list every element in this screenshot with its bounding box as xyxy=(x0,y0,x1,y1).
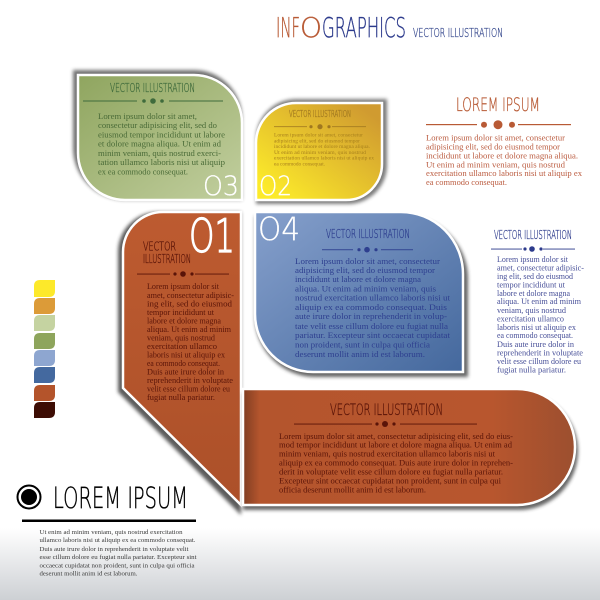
text: brown body: ing elit, sed do eiusmod xyxy=(147,300,232,308)
text: brown body: velit esse cillum dolore eu xyxy=(147,384,230,394)
text: bottom brown body: aliquip ex ea commodo consequat. Duis aute irure dolor in reprehen- xyxy=(279,458,513,467)
text: yellow body: Ut enim ad minim veniam, quis nostrud xyxy=(274,150,366,156)
text: bottom brown body: Excepteur sint occaecat cupidatat non proident, sunt in culpa qui xyxy=(279,476,502,485)
text: blue body: incididunt ut labore et dolore magna xyxy=(295,275,421,284)
heading: brown xyxy=(143,240,191,266)
text: blue body: nostrud exercitation ullamco laboris nisi ut xyxy=(295,294,451,302)
text: blue body: aliquip ex ea commodo consequat. Duis xyxy=(295,303,447,312)
text block xyxy=(40,529,197,577)
text block: tempor incididunt ut xyxy=(497,280,566,290)
number 04: O4 xyxy=(258,210,300,248)
text block: aliqua. Ut enim ad minim xyxy=(497,297,582,306)
panel: 01 brown xyxy=(118,209,241,515)
text block: exercitation ullamco laboris nisi ut aliquip ex xyxy=(426,169,582,178)
text: green body: et dolore magna aliqua. Ut enim ad xyxy=(98,140,221,148)
text: green body: ex ea commodo consequat. xyxy=(98,167,188,176)
text: green body: eiusmod tempor incididunt ut labore xyxy=(98,130,225,139)
text: yellow body: incididunt ut labore et dolore magna aliqua. xyxy=(274,144,371,150)
text block: ea commodo consequat. xyxy=(497,331,573,340)
number 03: O3 xyxy=(203,171,239,202)
colour palette xyxy=(34,280,55,418)
text: bottom brown body: mod tempor incididunt ut labore et dolore magna aliqua. Ut enim ad xyxy=(279,441,512,450)
text: yellow body: Lorem ipsum dolor sit amet, consectetur xyxy=(274,133,363,139)
text block: fugiat nulla pariatur. xyxy=(497,366,566,374)
text block xyxy=(426,134,582,187)
text block: ing elit, sed do eiusmod xyxy=(497,272,573,281)
text block: occaecat cupidatat non proident, sunt in culpa qui officia xyxy=(40,562,195,569)
text: green body: minim veniam, quis nostrud exerci- xyxy=(98,149,221,158)
title: VECTOR ILLUSTRATION xyxy=(413,25,503,40)
text: brown body xyxy=(147,282,234,402)
text: brown body: Lorem ipsum dolor sit xyxy=(147,282,220,291)
text block: velit esse cillum dolore eu xyxy=(497,357,581,366)
divider: blue xyxy=(322,247,413,252)
rule xyxy=(22,520,196,522)
text block: veniam, quis nostrud xyxy=(497,306,566,315)
text: bottom brown body: officia deserunt mollit anim id est laborum. xyxy=(279,485,426,494)
text: green body: Lorem ipsum dolor sit amet, xyxy=(98,112,197,121)
text: brown body: exercitation ullamco xyxy=(147,342,217,351)
panel: 02 yellow xyxy=(256,99,387,204)
text block: deserunt mollit anim id est laborum. xyxy=(40,570,138,577)
heading: LOREM IPSUM xyxy=(456,94,540,116)
text: bottom brown body: minim veniam, quis nostrud exercitation ullamco laboris nisi ut xyxy=(279,449,496,458)
text: bottom brown body xyxy=(279,432,513,494)
text block: esse cillum dolore eu fugiat nulla pariatur. Excepteur sint xyxy=(40,554,197,561)
title: INF xyxy=(276,11,300,44)
text block: Duis aute irure dolor in xyxy=(497,340,574,349)
panel: lorem ipsum bottom left xyxy=(18,481,197,577)
text: bottom brown body: derit in voluptate velit esse cillum dolore eu fugiat nulla pariatur. xyxy=(279,467,503,476)
text block: amet, consectetur adipisic- xyxy=(497,264,584,272)
text block: laboris nisi ut aliquip ex xyxy=(497,323,576,332)
text block: labore et dolore magna xyxy=(497,289,570,298)
text: brown body: labore et dolore magna xyxy=(147,316,221,326)
heading: green: VECTOR ILLUSTRATION xyxy=(110,80,195,95)
panel: 04 blue xyxy=(255,210,468,377)
text: green body xyxy=(98,112,225,176)
text block: incididunt ut labore et dolore magna aliqua. xyxy=(426,152,578,160)
text block xyxy=(497,255,584,374)
divider: green xyxy=(83,98,223,104)
text block: adipisicing elit, sed do eiusmod tempor xyxy=(426,142,560,152)
heading: brown: ILLUSTRATION xyxy=(143,252,191,266)
text: blue body: tate velit esse cillum dolore eu fugiat nulla xyxy=(295,322,448,331)
text: green body: consectetur adipisicing elit, sed do xyxy=(98,121,217,130)
text: blue body: aliqua. Ut enim ad minim veniam, quis xyxy=(295,284,436,294)
text block: Duis aute irure dolor in reprehenderit in voluptate velit xyxy=(40,546,189,553)
number 02: O2 xyxy=(259,171,292,202)
number 01: O1 xyxy=(189,209,235,263)
text: blue body: pariatur. Excepteur sint occaecat cupidatat xyxy=(295,331,451,340)
text: blue body: deserunt mollit anim id est laborum. xyxy=(295,350,425,359)
text: blue body: adipisicing elit, sed do eiusmod tempor xyxy=(295,266,435,275)
text: blue body: aute irure dolor in reprehenderit in volup- xyxy=(295,312,447,321)
text: brown body: tempor incididunt ut xyxy=(147,308,215,317)
text: yellow body xyxy=(274,133,374,167)
text: yellow body: exercitation ullamco laboris nisi ut aliquip ex xyxy=(274,156,374,162)
heading: bottom brown: VECTOR ILLUSTRATION xyxy=(330,400,443,419)
text block: Ut enim ad minim veniam, quis nostrud exercitation xyxy=(40,529,183,536)
panel: bottom brown xyxy=(243,389,578,510)
title: GRAPHICS xyxy=(322,11,406,44)
text: brown body: fugiat nulla pariatur. xyxy=(147,393,215,402)
text: brown body: Duis aute irure dolor in xyxy=(147,368,224,376)
divider: yellow xyxy=(274,124,366,129)
heading: yellow: VECTOR ILLUSTRATION xyxy=(289,109,351,120)
panel: lorem ipsum top right xyxy=(426,94,582,187)
heading: brown: VECTOR xyxy=(143,240,176,254)
heading: LOREM IPSUM xyxy=(53,481,188,515)
text: brown body: aliqua. Ut enim ad minim xyxy=(147,325,232,334)
text: brown body: laboris nisi ut aliquip ex xyxy=(147,350,225,360)
panel: 03 green xyxy=(73,70,242,202)
text block: ullamco laboris nisi ut aliquip ex ea commodo consequat. xyxy=(40,537,196,544)
text block: exercitation ullamco xyxy=(497,314,564,324)
text: brown body: veniam, quis nostrud xyxy=(147,334,215,342)
text: blue body xyxy=(295,257,451,359)
text block: Lorem ipsum dolor sit amet, consectetur xyxy=(426,134,565,142)
divider xyxy=(426,120,571,129)
text block: Lorem ipsum dolor sit xyxy=(497,255,569,264)
icon: target bullet xyxy=(18,486,40,508)
text: blue body: non proident, sunt in culpa qui officia xyxy=(295,340,430,350)
text: yellow body: ea commodo consequat. xyxy=(274,161,326,167)
text: green body: tation ullamco laboris nisi ut aliquip xyxy=(98,158,225,167)
text block: Ut enim ad minim veniam, quis nostrud xyxy=(426,160,565,170)
heading: blue: VECTOR ILLUSTRATION xyxy=(326,226,410,241)
text: blue body: Lorem ipsum dolor sit amet, consectetur xyxy=(295,257,440,266)
title: O xyxy=(300,11,322,44)
text: yellow body: adipisicing elit, sed do eiusmod tempor xyxy=(274,138,360,144)
text: brown body: amet, consectetur adipisic- xyxy=(147,291,234,300)
text block: ea commodo consequat. xyxy=(426,178,507,187)
text: brown body: reprehenderit in voluptate xyxy=(147,376,233,385)
text: brown body: ea commodo consequat. xyxy=(147,359,220,368)
divider xyxy=(491,246,575,252)
title xyxy=(276,11,503,44)
divider: brown xyxy=(137,271,229,277)
text block: reprehenderit in voluptate xyxy=(497,348,583,358)
panel: vector illustration right column xyxy=(491,228,584,374)
text: bottom brown body: Lorem ipsum dolor sit amet, consectetur adipisicing elit, sed do eius- xyxy=(279,432,513,441)
divider: bottom brown xyxy=(294,421,477,427)
